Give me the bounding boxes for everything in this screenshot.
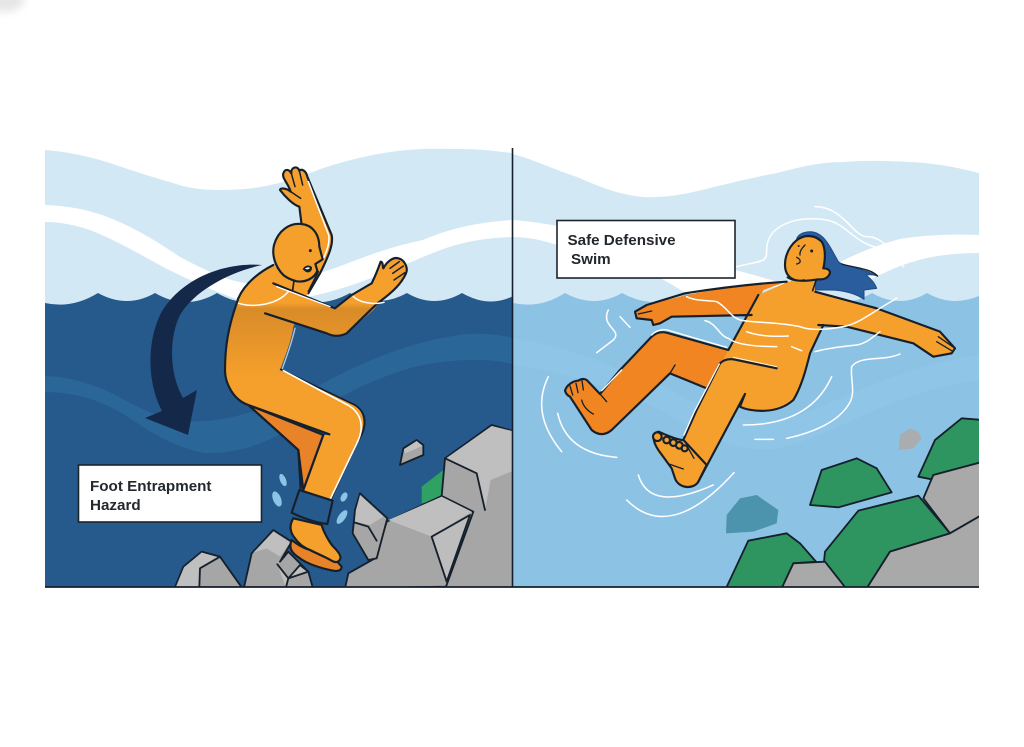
thigh underside — [248, 405, 323, 490]
ankle cuff — [292, 490, 333, 524]
rock: bottom middle — [244, 530, 313, 587]
figure: floating swimmer — [542, 207, 955, 516]
water drops — [270, 473, 349, 526]
label box: safe defensive swim: Swim — [571, 251, 611, 268]
label box: safe defensive swim: Safe Defensive — [568, 232, 676, 249]
ripple lines around body — [542, 207, 903, 516]
dark left arm — [635, 282, 787, 325]
water: light blue — [505, 293, 985, 590]
water: swell band — [513, 338, 979, 450]
torso and leg — [225, 265, 363, 500]
front foot — [653, 432, 707, 487]
label box: safe defensive swim — [557, 220, 735, 278]
background: white wave band — [45, 205, 512, 300]
foot — [290, 518, 342, 571]
rock: falling pebble — [400, 440, 423, 465]
panel: foot entrapment hazard — [40, 149, 515, 590]
water: swell band — [45, 334, 512, 453]
body outlines — [635, 282, 955, 482]
background: white wave band — [513, 220, 979, 298]
rock: green top right — [918, 418, 983, 479]
lower arm and hand — [237, 258, 407, 336]
corner smudge — [0, 0, 24, 12]
ground line — [45, 586, 979, 588]
hair — [797, 232, 877, 299]
rock: distant grey pebble — [898, 428, 922, 450]
torso rim — [282, 328, 295, 369]
toes and creases: rear foot — [570, 365, 675, 414]
rocks — [726, 418, 983, 588]
water: deep blue — [40, 293, 515, 590]
rock: bottom left — [175, 552, 242, 587]
head — [273, 224, 323, 292]
torso and right leg — [653, 282, 955, 487]
rock: upper fragment — [353, 493, 387, 560]
rock: front centre — [345, 496, 473, 588]
rock: submerged teal — [726, 495, 778, 533]
background: sky wave — [45, 149, 512, 310]
rock: grey bottom right — [867, 514, 983, 588]
rock: green moss — [422, 470, 443, 503]
rock: grey lower — [782, 562, 846, 588]
label box: foot entrapment hazard: Hazard — [90, 497, 141, 514]
raised arm and hand — [280, 167, 332, 293]
rock: back right — [442, 425, 515, 588]
fingers — [638, 311, 953, 351]
leg outline — [225, 265, 329, 490]
centre divider — [512, 148, 514, 587]
dark left leg and foot — [565, 332, 743, 434]
rock: green large — [824, 496, 950, 588]
rock: green lower — [726, 533, 816, 588]
background: sky wave — [513, 154, 979, 310]
rock: grey top right — [923, 462, 983, 533]
head — [785, 236, 830, 292]
figure: swimmer trapped by foot — [225, 167, 407, 571]
white rim on dark leg — [602, 330, 727, 391]
label box: foot entrapment hazard: Foot Entrapment — [90, 478, 212, 495]
panel: safe defensive swim — [505, 154, 985, 590]
rock: green middle — [810, 458, 892, 507]
arrow: downward current — [145, 265, 262, 435]
thigh rim — [281, 369, 365, 500]
label box: foot entrapment hazard — [78, 465, 262, 522]
rocks and foot area — [175, 425, 515, 588]
